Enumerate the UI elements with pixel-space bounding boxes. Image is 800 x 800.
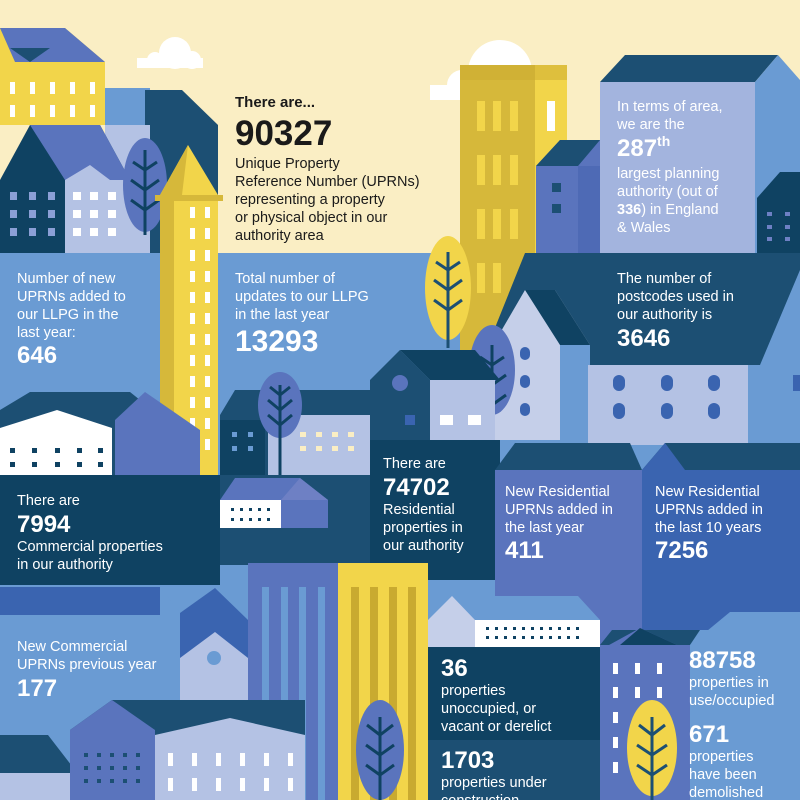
text: under construction xyxy=(441,747,547,800)
text: postcodes: postcodes used in xyxy=(617,289,734,305)
mid blue house 88758 xyxy=(690,612,800,800)
navy block 74702 xyxy=(370,440,500,580)
text: residential: 74702 xyxy=(383,474,450,501)
dotted house above 36 xyxy=(428,596,600,647)
yellow spire tower xyxy=(155,145,223,476)
text: area rank: authority (out of xyxy=(617,184,719,200)
text: vacant: unoccupied, or xyxy=(441,701,536,717)
text: commercial: 7994 xyxy=(17,511,71,538)
text: postcodes: 3646 xyxy=(617,325,670,352)
text: updates xyxy=(235,271,369,358)
text: area rank: largest planning xyxy=(617,166,719,182)
text: vacant: vacant or derelict xyxy=(441,719,551,735)
text: area rank xyxy=(616,99,723,236)
text: area rank: & Wales xyxy=(617,220,670,236)
text: new residential last year: 411 xyxy=(505,537,544,564)
lavender arched building right xyxy=(588,365,800,445)
text: total UPRNs: 90327 xyxy=(235,114,332,153)
mid blue ground xyxy=(0,253,800,800)
periwinkle tree bottom xyxy=(356,700,404,800)
text: new residential 10 years xyxy=(655,484,763,564)
text: new UPRNs: last year: xyxy=(17,325,76,341)
navy house with circle xyxy=(370,350,500,475)
text: residential xyxy=(383,456,464,554)
text: vacant: properties xyxy=(441,683,505,699)
text: new UPRNs: our LLPG in the xyxy=(17,307,119,323)
middle navy roof area right xyxy=(480,253,800,365)
text: vacant: 36 xyxy=(441,655,468,682)
text: occupied and demolished: 88758 xyxy=(689,647,756,674)
navy panel 1703 xyxy=(428,740,600,800)
text: new commercial: New Commercial xyxy=(17,639,127,655)
periwinkle tree left-mid xyxy=(258,372,302,478)
text: under construction: properties under xyxy=(441,775,547,791)
text: residential: There are xyxy=(383,456,446,472)
right lavender building xyxy=(600,55,800,253)
text: new commercial: 177 xyxy=(17,675,57,702)
text: postcodes: our authority is xyxy=(617,307,712,323)
text: commercial xyxy=(17,493,163,573)
text: commercial: There are xyxy=(17,493,80,509)
text: new residential 10 years: UPRNs added in xyxy=(655,502,763,518)
text: total UPRNs: representing a property xyxy=(235,192,386,208)
cloud left xyxy=(137,37,203,69)
text: occupied and demolished: properties xyxy=(689,749,753,765)
text: new commercial xyxy=(17,639,157,702)
text: residential: properties in xyxy=(383,520,463,536)
text: residential: Residential xyxy=(383,502,455,518)
text: updates: 13293 xyxy=(235,325,318,358)
roofs over residential panels xyxy=(495,443,800,470)
text: updates: Total number of xyxy=(235,271,336,287)
text: area rank: th xyxy=(657,133,670,149)
text: occupied and demolished: have been xyxy=(689,767,757,783)
text: total UPRNs: There are... xyxy=(235,94,315,111)
text: new residential 10 years: 7256 xyxy=(655,537,708,564)
text: occupied and demolished: use/occupied xyxy=(689,693,774,709)
navy lower-left block xyxy=(0,475,220,585)
text: occupied and demolished xyxy=(689,647,774,800)
text: total UPRNs: authority area xyxy=(235,228,325,244)
periwinkle building xyxy=(536,140,600,253)
text: vacant xyxy=(441,655,551,735)
text: new UPRNs: UPRNs added to xyxy=(17,289,126,305)
text: residential: our authority xyxy=(383,538,464,554)
yellow tree bottom right xyxy=(627,700,677,800)
cloud right xyxy=(430,40,548,104)
periwinkle striped building xyxy=(248,563,338,800)
tall yellow building center xyxy=(460,65,567,355)
text: area rank: 287 xyxy=(617,135,657,162)
periwinkle building with windows xyxy=(600,628,700,800)
text: new residential last year: UPRNs added in xyxy=(505,502,613,518)
text: postcodes xyxy=(617,271,734,352)
text: new residential 10 years: the last 10 years xyxy=(655,520,761,536)
commercial panel xyxy=(0,587,180,700)
periwinkle tree middle xyxy=(469,325,515,445)
text: new UPRNs: 646 xyxy=(17,342,57,369)
text: updates: in the last year xyxy=(235,307,329,323)
royal blue panel 7256 xyxy=(642,443,800,630)
periwinkle panel 411 xyxy=(495,470,642,660)
navy panel 36 xyxy=(428,647,600,740)
text: new UPRNs: Number of new xyxy=(17,271,116,287)
top-left buildings xyxy=(0,28,218,253)
small white house xyxy=(220,478,328,528)
text: new residential last year: New Residential xyxy=(505,484,610,500)
text: commercial: in our authority xyxy=(17,557,114,573)
mid houses row xyxy=(0,390,370,475)
text: updates: updates to our LLPG xyxy=(235,289,369,305)
sky background xyxy=(0,0,800,260)
bottom-left houses xyxy=(0,700,305,800)
yellow striped building xyxy=(338,563,428,800)
text: new residential 10 years: New Residential xyxy=(655,484,760,500)
yellow tree middle xyxy=(425,236,471,348)
text: new UPRNs xyxy=(17,271,126,369)
text: under construction: 1703 xyxy=(441,747,494,774)
tree periwinkle top-left xyxy=(123,138,167,235)
text: total UPRNs: Unique Property xyxy=(235,156,341,172)
lavender house middle xyxy=(493,290,590,440)
text: area rank: 336) in England xyxy=(617,202,719,218)
text: commercial: Commercial properties xyxy=(17,539,163,555)
text: area rank: In terms of area, xyxy=(617,99,723,115)
text: area rank: we are the xyxy=(616,117,685,133)
text: total UPRNs: Reference Number (UPRNs) xyxy=(235,174,420,190)
text: new residential last year xyxy=(505,484,613,564)
small lavender house with dot xyxy=(180,588,248,700)
text: new residential last year: the last year xyxy=(505,520,584,536)
text: postcodes: The number of xyxy=(617,271,712,287)
text: total UPRNs xyxy=(235,94,420,244)
text: occupied and demolished: properties in xyxy=(689,675,769,691)
text: new commercial: UPRNs previous year xyxy=(17,657,157,673)
text: occupied and demolished: 671 xyxy=(689,721,729,748)
text: total UPRNs: or physical object in our xyxy=(235,210,387,226)
